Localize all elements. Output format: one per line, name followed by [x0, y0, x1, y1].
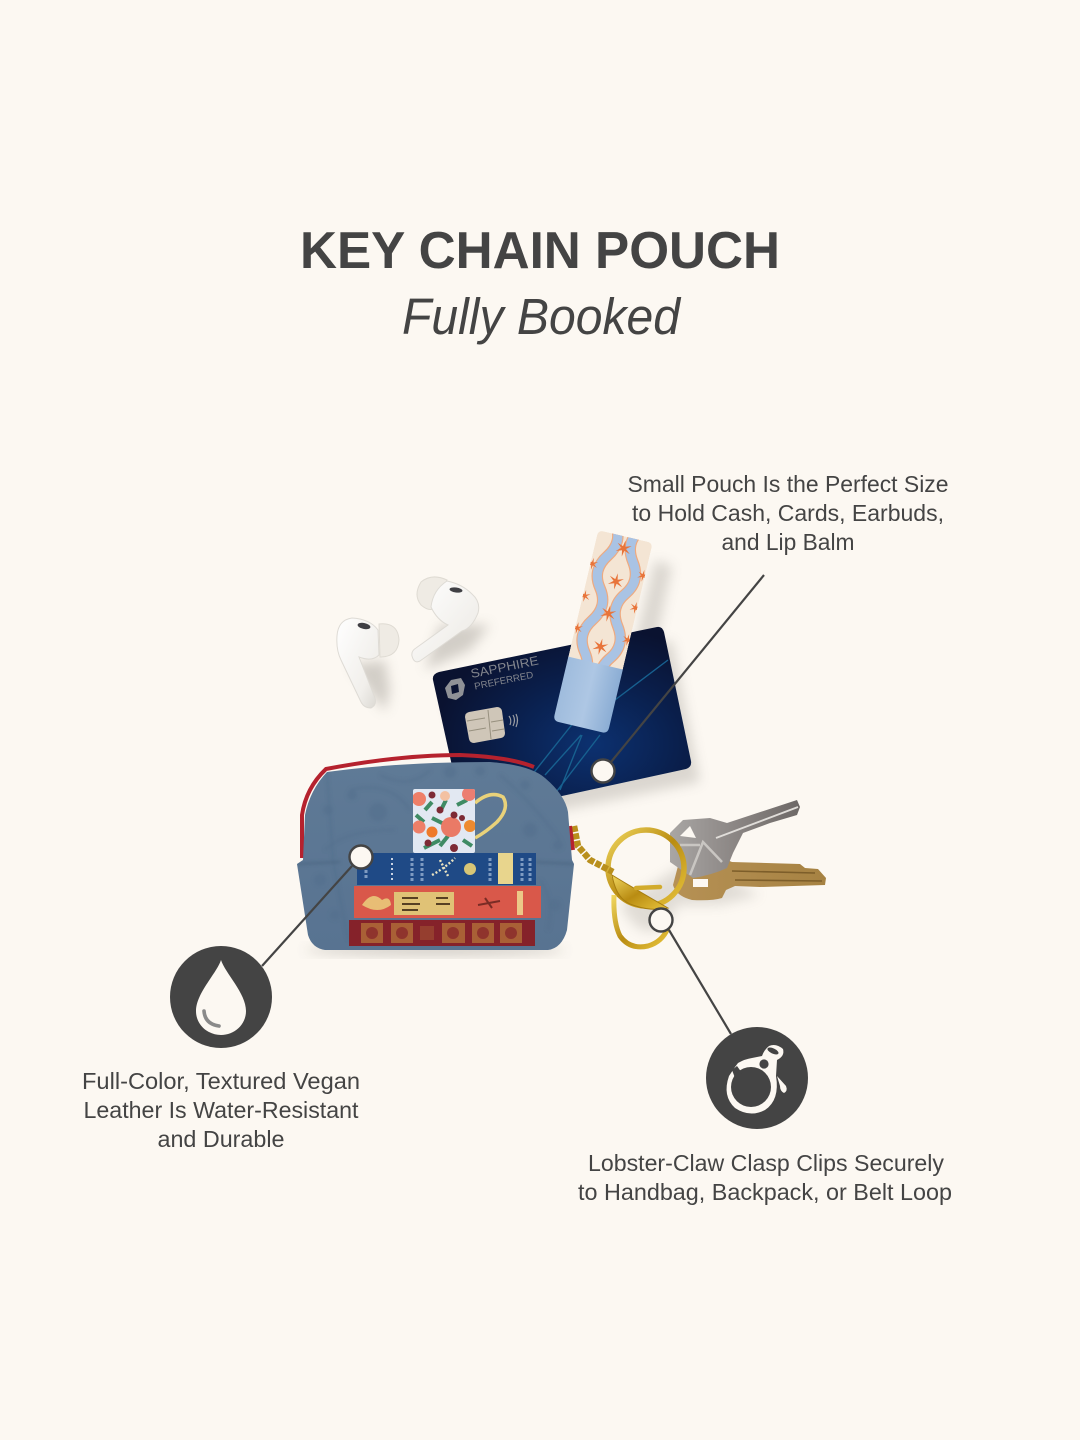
text block: pouch size callout: Small Pouch Is the Perfect Size [628, 471, 948, 497]
pouch body [297, 762, 574, 950]
mug [412, 787, 505, 853]
text block: material callout [82, 1068, 360, 1152]
balm sleeve: ✶ [634, 567, 651, 587]
balm cap [553, 657, 623, 734]
balm sleeve: ✶ [576, 587, 593, 607]
brass key [673, 858, 826, 900]
marker dot: pouch size [592, 760, 614, 782]
text block: pouch size callout: and Lip Balm [722, 529, 854, 555]
icon: water drop [170, 946, 272, 1048]
text block: clasp callout: Lobster-Claw Clasp Clips Securely [588, 1150, 944, 1176]
book: dark red [349, 920, 535, 946]
lip balm [554, 531, 652, 733]
connector line: clasp [669, 930, 731, 1034]
balm sleeve: ✶ [596, 600, 620, 628]
card name [469, 654, 542, 693]
contactless mark [509, 714, 518, 727]
connector line: pouch size [611, 575, 764, 762]
marker dot: material [350, 846, 372, 868]
subtitle: Fully Booked [402, 288, 682, 345]
text block: pouch size callout: to Hold Cash, Cards, Earbuds, [632, 500, 944, 526]
text block: pouch size callout [628, 471, 948, 555]
key chain hardware [574, 800, 826, 947]
book: red [354, 886, 541, 918]
book: blue [357, 853, 536, 885]
card logo [445, 678, 465, 700]
lobster clasp [612, 875, 668, 947]
card chip [465, 707, 505, 743]
balm sleeve: ✶ [584, 555, 601, 575]
zipper [302, 755, 573, 858]
earbuds [337, 577, 490, 712]
text block: material callout: Full-Color, Textured Vegan [82, 1068, 360, 1094]
card name: SAPPHIRE [469, 654, 540, 681]
balm sleeve: ✶ [568, 619, 585, 639]
text block: material callout: Leather Is Water-Resistant [84, 1097, 359, 1123]
text block: material callout: and Durable [158, 1126, 284, 1152]
key ring [608, 830, 684, 906]
right earbud [412, 577, 479, 662]
balm sleeve: ✶ [619, 631, 636, 651]
connector line: material [262, 866, 352, 966]
pouch [297, 755, 574, 955]
chain [574, 826, 613, 872]
balm sleeve: ✶ [589, 633, 612, 661]
left earbud [337, 618, 399, 708]
balm sleeve: ✶ [612, 535, 635, 563]
balm sleeve: ✶ [604, 568, 628, 596]
text block: clasp callout [578, 1150, 952, 1205]
balm sleeve: ✶ [627, 599, 644, 619]
card name: PREFERRED [473, 670, 535, 693]
icon: lobster clasp [706, 1027, 808, 1129]
credit card [433, 560, 700, 826]
text block: clasp callout: to Handbag, Backpack, or Belt Loop [578, 1179, 952, 1205]
balm sleeve [568, 531, 652, 670]
marker dot: clasp [650, 908, 672, 932]
silver key [670, 800, 800, 878]
title: KEY CHAIN POUCH [300, 222, 780, 280]
